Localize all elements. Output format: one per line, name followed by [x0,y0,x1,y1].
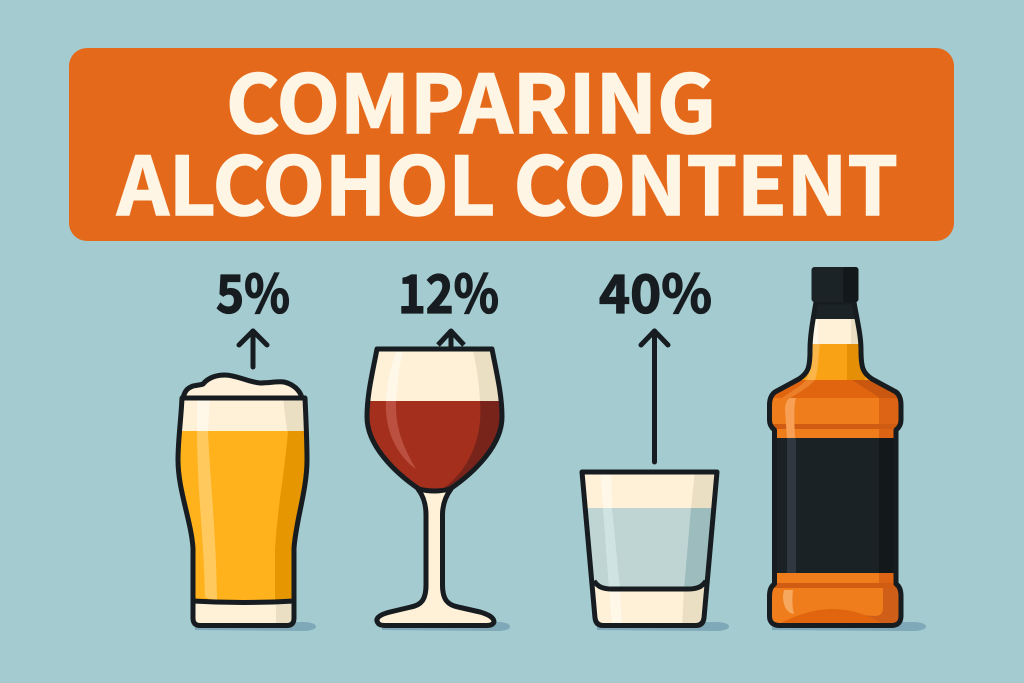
title line 1: COMPARING [226,41,716,157]
spirit percentage label: 40% [599,253,712,329]
wine percentage label: 12% [398,253,499,329]
shot glass [575,470,729,631]
beer percentage label: 5% [216,253,290,329]
title line 2: ALCOHOL CONTENT [116,123,898,239]
arrow: spirit [641,331,668,462]
wine glass [360,345,510,631]
title banner [69,41,954,241]
arrow: wine [438,331,464,349]
whiskey bottle [760,267,926,631]
bottle cap [812,267,858,302]
arrow: beer [239,331,267,367]
infographic canvas [69,48,954,631]
beer pint glass [170,375,316,631]
